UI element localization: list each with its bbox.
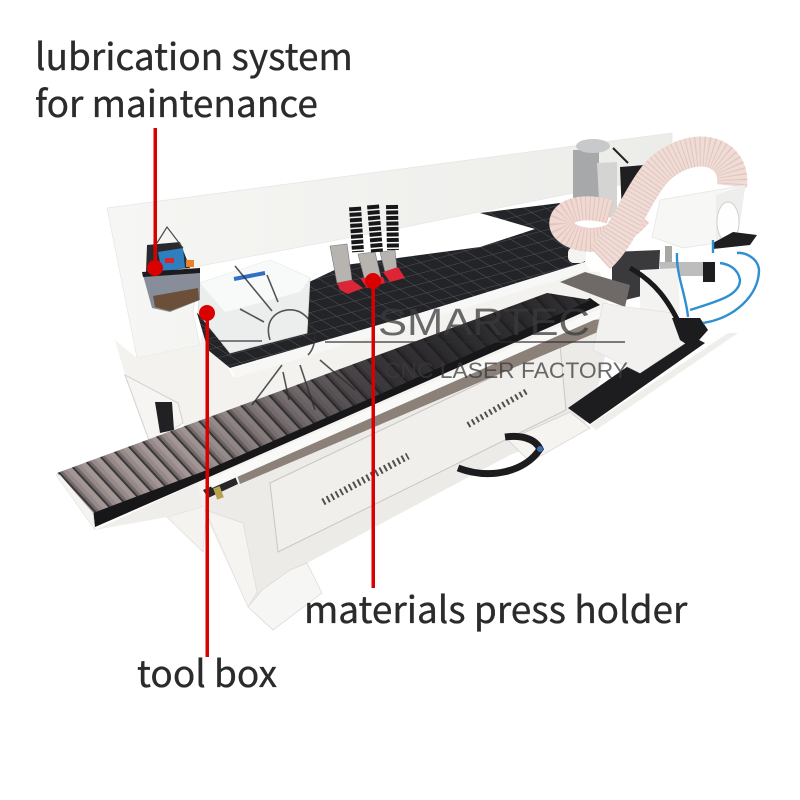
flexible dust hoses [561, 152, 732, 258]
rear support under bellows [95, 478, 210, 552]
callout: materials press holder [304, 273, 688, 634]
watermark tagline: CNC LASER FACTORY [384, 358, 628, 383]
lower white saw housing [593, 268, 708, 373]
linear rail [203, 318, 612, 500]
label: lubrication system [35, 27, 353, 81]
label: for maintenance [35, 74, 318, 128]
callout: lubrication system [35, 27, 353, 276]
black hose with blue ends [458, 436, 543, 474]
bellows cover [56, 293, 603, 530]
sunburst logo rays [210, 266, 625, 410]
coiled black air tubes [355, 205, 393, 252]
leader line [154, 128, 157, 268]
leader line [206, 313, 209, 657]
steel cylinders [330, 244, 397, 285]
marker dot [147, 260, 163, 276]
drag chain and white base [508, 330, 738, 462]
side box with motor [125, 375, 183, 443]
main machine body [115, 270, 612, 630]
blue pneumatic tubes [677, 240, 759, 323]
tool box [198, 260, 310, 353]
side access panel with chevrons [270, 345, 566, 552]
label: materials press holder [304, 580, 688, 634]
dust extraction box [652, 185, 757, 249]
marker dot [199, 305, 215, 321]
red press feet [337, 267, 405, 294]
label: tool box [137, 644, 277, 698]
marker dot [365, 273, 381, 289]
gantry beam [107, 133, 672, 358]
spindle motor [573, 139, 645, 218]
carriage mechanism [560, 246, 715, 307]
watermark [210, 266, 628, 410]
callout: tool box [137, 305, 277, 698]
machine illustration [56, 133, 759, 630]
press holders with coiled air lines [330, 205, 405, 294]
leader line [372, 281, 375, 588]
lubrication pump [142, 227, 200, 312]
watermark company name: SMARTEC [378, 302, 590, 344]
diamond-pattern work bed [197, 203, 590, 378]
